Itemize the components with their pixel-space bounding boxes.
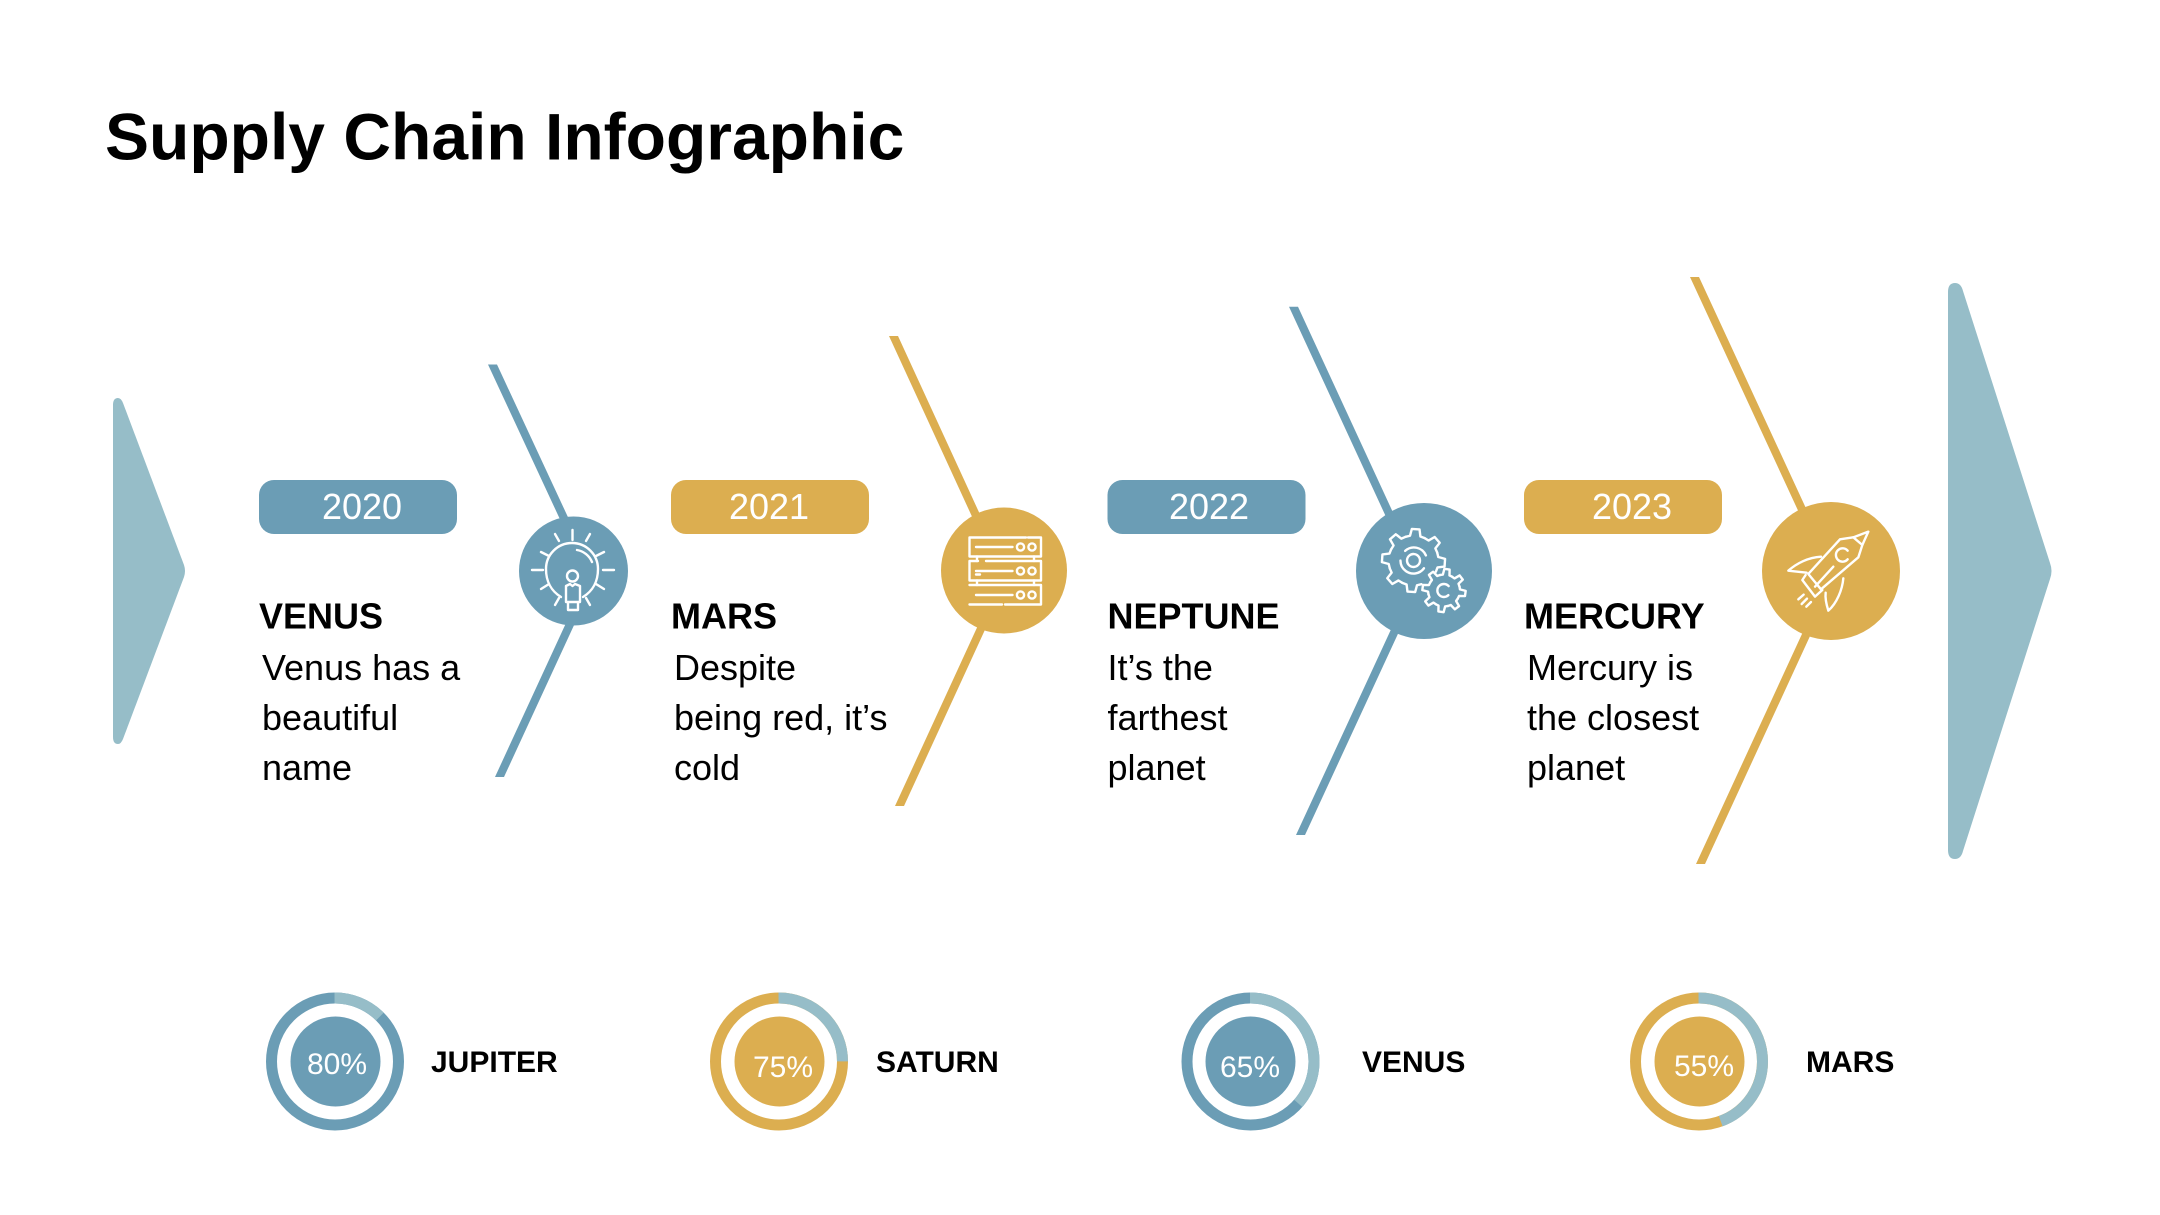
- year pill: 2020: 2020: [322, 486, 402, 527]
- year pill: 2021: [671, 480, 869, 534]
- heading: Neptune: NEPTUNE: [1108, 596, 1280, 636]
- donut: Mars 55%: [1636, 998, 1894, 1125]
- year pill: 2022: 2022: [1169, 486, 1249, 527]
- ring: [1187, 998, 1314, 1125]
- text: Neptune description: farthest: [1108, 697, 1228, 738]
- arrow: right end: [1948, 283, 2052, 859]
- panel: 2020 Venus: [259, 480, 461, 788]
- center value: 55%: [1674, 1050, 1734, 1083]
- center value: [734, 1016, 824, 1106]
- text: Mars description: Despite: [674, 647, 796, 688]
- arrow: left start: [113, 398, 185, 744]
- text: Neptune description: planet: [1108, 747, 1206, 788]
- heading: Mars: MARS: [671, 596, 777, 636]
- year pill: 2023: [1524, 480, 1722, 534]
- ring: [716, 998, 842, 1125]
- donut: Saturn 75%: [716, 998, 999, 1125]
- heading: Mercury: MERCURY: [1524, 596, 1705, 636]
- panel: 2021 Mars: [671, 480, 887, 788]
- ring: [272, 998, 398, 1125]
- label: SATURN: [876, 1046, 999, 1079]
- panel: 2023 Mercury: [1524, 480, 1722, 788]
- text: Mars description: being red, it’s: [674, 697, 887, 738]
- label: VENUS: [1362, 1046, 1465, 1079]
- text: Mars description: cold: [674, 747, 740, 788]
- donut: Jupiter 80%: [272, 998, 558, 1125]
- year pill: 2023: 2023: [1592, 486, 1672, 527]
- panel: 2022 Neptune: [1108, 480, 1306, 788]
- icon: server racks: [941, 508, 1067, 634]
- icon: light bulb: [519, 516, 628, 626]
- heading: Venus: VENUS: [259, 596, 383, 636]
- donut: Venus 65%: [1187, 998, 1465, 1125]
- center value: 75%: [753, 1051, 813, 1084]
- ring: [1636, 998, 1762, 1125]
- chevron line: step 3: [1289, 307, 1427, 835]
- icon: rocket: [1762, 502, 1900, 640]
- label: MARS: [1806, 1046, 1894, 1079]
- text: Mercury description: the closest: [1527, 697, 1699, 738]
- title: Supply Chain Infographic: [105, 100, 904, 174]
- text: Mercury description: planet: [1527, 747, 1625, 788]
- text: Venus description: name: [262, 747, 352, 788]
- chevron line: step 4: [1690, 277, 1840, 864]
- text: Neptune description: It’s the: [1108, 647, 1213, 688]
- text: Venus description: beautiful: [262, 697, 398, 738]
- icon: gears: [1356, 503, 1492, 639]
- center value: [1654, 1016, 1744, 1106]
- chevron line: step 2: [889, 336, 1012, 806]
- chevron line: step 1: [488, 364, 599, 777]
- year pill: 2022: [1108, 480, 1306, 534]
- center value: 65%: [1220, 1051, 1280, 1084]
- year pill: 2020: [259, 480, 457, 534]
- center value: [290, 1016, 380, 1106]
- year pill: 2021: 2021: [729, 486, 809, 527]
- text: Mercury description: Mercury is: [1527, 647, 1693, 688]
- label: JUPITER: [431, 1046, 558, 1079]
- text: Venus description: Venus has a: [262, 647, 461, 688]
- center value: [1206, 1016, 1296, 1106]
- center value: 80%: [307, 1048, 367, 1081]
